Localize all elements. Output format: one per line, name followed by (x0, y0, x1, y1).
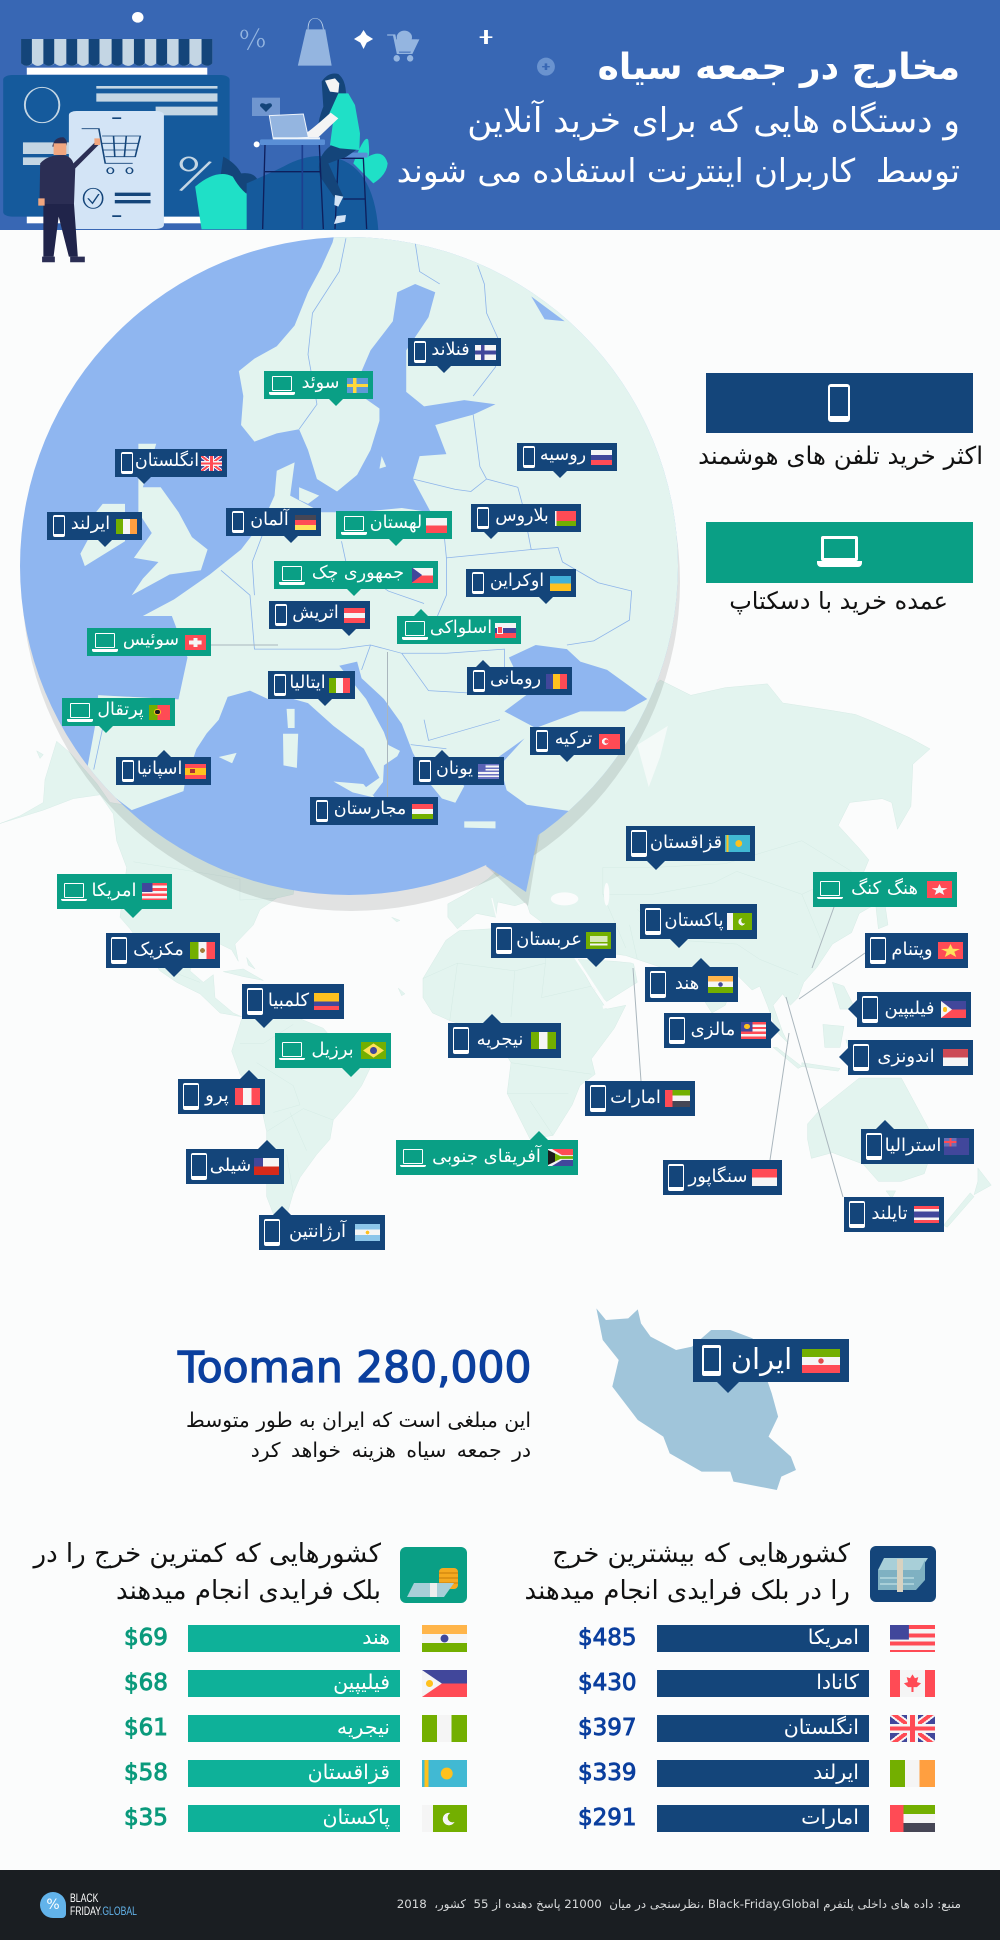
label: Italy: ایتالیا (289, 673, 326, 693)
label: Turkey: ترکیه (555, 729, 592, 749)
text: نیجریه (337, 1715, 390, 1739)
low spenders row: Kazakhstan (124, 1760, 467, 1787)
label: Australia (861, 1129, 974, 1164)
label: Portugal (62, 698, 175, 726)
text: $397 (578, 1715, 637, 1741)
text: $68 (124, 1670, 168, 1696)
label: UK (115, 449, 227, 477)
label: Italy (268, 671, 355, 699)
label: USA (57, 874, 172, 909)
label: Colombia (242, 984, 344, 1019)
top spenders row: UAE (578, 1805, 935, 1832)
label: Ukraine (466, 569, 576, 597)
label: South Africa (396, 1140, 578, 1175)
label: UAE: امارات (610, 1086, 661, 1108)
text: $339 (578, 1760, 637, 1786)
footer source text: منبع: داده های داخلی پلتفرم Black-Friday.Global ،نظرسنجی در میان 21000 پاسخ دهنده از 55 کشور، 2018 (397, 1897, 961, 1911)
label: Iran (693, 1339, 849, 1382)
label: Finland (408, 338, 501, 366)
label: Finland: فنلاند (431, 340, 470, 360)
text: قزاقستان (308, 1760, 390, 1784)
label: Ireland: ایرلند (71, 514, 110, 534)
label: Nigeria (448, 1023, 561, 1058)
label: Indonesia (848, 1040, 973, 1075)
label: Austria: اتریش (292, 603, 339, 623)
section title: top spenders: کشورهایی که بیشترین خرج (552, 1539, 850, 1569)
footer logo: FRIDAY.GLOBAL (70, 1904, 137, 1918)
text: $430 (578, 1670, 637, 1696)
label: Singapore: سنگاپور (689, 1166, 747, 1186)
text: $69 (124, 1625, 168, 1651)
connector lines (211, 645, 865, 1197)
text: در جمعه سیاه هزینه خواهد کرد (251, 1438, 531, 1462)
label: Iran: ایران (731, 1342, 792, 1376)
title: مخارج در جمعه سیاه (598, 47, 960, 88)
subtitle line 1: و دستگاه هایی که برای خرید آنلاین (467, 101, 960, 141)
text: $35 (124, 1805, 168, 1831)
label: Malaysia: مالزی (691, 1018, 735, 1040)
label: Germany: آلمان (250, 510, 289, 530)
label: Hong Kong: هنگ کنگ (851, 878, 918, 898)
icon: money stack (870, 1546, 936, 1602)
label: Kazakhstan: قزاقستان (650, 832, 722, 852)
label: Romania: رومانی (490, 669, 541, 689)
top spenders row: USA (578, 1625, 935, 1652)
label: Greece: یونان (436, 759, 473, 779)
label: Brazil (275, 1033, 391, 1068)
text: $61 (124, 1715, 168, 1741)
label: Hungary: مجارستان (334, 799, 406, 819)
label: Switzerland (87, 628, 211, 656)
footer logo (40, 1891, 137, 1918)
label: Turkey (530, 727, 625, 755)
text: $291 (578, 1805, 637, 1831)
top spenders row: UK (578, 1715, 935, 1742)
label: Mexico: مکزیک (133, 938, 184, 960)
text: هند (362, 1625, 390, 1649)
legend: desktop (706, 522, 973, 583)
label: Malaysia (664, 1013, 771, 1048)
text: کانادا (816, 1670, 859, 1694)
label: Russia: روسیه (540, 445, 586, 465)
legend caption: desktop: عمده خرید با دسکتاپ (729, 587, 948, 615)
label: Slovakia: اسلواکی (430, 618, 492, 638)
label: Sweden (264, 371, 373, 399)
label: Kazakhstan (626, 826, 755, 861)
label: Saudi Arabia (491, 923, 616, 958)
label: Peru: پرو (205, 1084, 229, 1106)
Africa, Asia, Australia (423, 680, 991, 1227)
store panel (3, 39, 230, 223)
label: Thailand: تایلند (871, 1202, 908, 1224)
label: Spain: اسپانیا (137, 759, 182, 779)
text: را در بلک فرایدی انجام میدهند (525, 1576, 850, 1606)
section title: low spenders: کشورهایی که کمترین خرج را در (34, 1539, 381, 1569)
text: بلک فرایدی انجام میدهند (116, 1576, 381, 1606)
world and Europe map (0, 237, 992, 1228)
label: Hungary (310, 797, 438, 825)
label: Pakistan (640, 904, 757, 939)
label: India (645, 967, 738, 1002)
label: Poland (336, 511, 452, 539)
phone with cart (69, 111, 164, 229)
text: امارات (801, 1805, 859, 1829)
label: Argentina: آرژانتین (289, 1220, 346, 1242)
low spenders row: India (124, 1625, 467, 1652)
footer band (0, 1870, 1000, 1940)
woman at laptop scene (247, 74, 388, 230)
footer logo: BLACK (70, 1891, 98, 1905)
left plant (195, 157, 273, 229)
label: Germany (226, 508, 321, 536)
label: Australia: استرالیا (885, 1134, 941, 1156)
label: Ireland (47, 512, 142, 540)
text: فیلیپین (333, 1670, 390, 1694)
label: Saudi Arabia: عربستان (516, 928, 582, 950)
label: Romania (467, 667, 572, 695)
label: UK: انگلستان (135, 451, 199, 471)
header band (0, 0, 1000, 230)
footer logo: % (46, 1897, 60, 1913)
label: Hong Kong (813, 872, 957, 907)
label: India: هند (675, 972, 699, 994)
circle shadow (22, 253, 680, 911)
text: ایرلند (813, 1760, 859, 1784)
text: انگلستان (784, 1715, 859, 1739)
Europe land (80, 237, 678, 828)
label: Colombia: کلمبیا (268, 990, 309, 1010)
label: Indonesia: اندونزی (877, 1046, 935, 1066)
label: USA: امریکا (91, 880, 136, 900)
label: Portugal: پرتقال (97, 700, 144, 720)
label: Chile: شیلی (210, 1154, 251, 1176)
label: Switzerland: سوئیس (123, 630, 179, 650)
label: Russia (517, 443, 617, 471)
label: Pakistan: پاکستان (664, 910, 724, 930)
subtitle line 2: توسط کاربران اینترنت استفاده می شوند (397, 152, 960, 190)
header illustration (3, 12, 555, 262)
label: Poland: لهستان (370, 513, 422, 533)
label: Thailand (844, 1197, 944, 1232)
label: Spain (116, 757, 211, 785)
floating icons (132, 12, 555, 76)
map callout tail (486, 830, 538, 892)
Iran map (596, 1308, 796, 1490)
label: Czech Republic (274, 561, 438, 589)
label: Sweden: سوئد (302, 373, 339, 393)
label: Mexico (106, 933, 220, 968)
amount description: این مبلغی است که ایران به طور متوسط (186, 1408, 531, 1432)
low spenders row: Philippines (124, 1670, 467, 1697)
label: South Africa: آفریقای جنوبی (432, 1146, 541, 1166)
label: UAE (585, 1081, 695, 1116)
label: Peru (178, 1079, 265, 1114)
text: امریکا (808, 1625, 859, 1649)
label: Brazil: برزیل (311, 1038, 354, 1060)
label: Slovakia (397, 616, 521, 644)
text: $58 (124, 1760, 168, 1786)
label: Philippines (857, 992, 971, 1027)
top spenders row: Ireland (578, 1760, 935, 1787)
label: Argentina (259, 1215, 385, 1250)
label: Austria (269, 601, 370, 629)
label: Belarus (471, 504, 581, 532)
label: Vietnam: ویتنام (891, 938, 933, 960)
top spenders row: Canada (578, 1670, 935, 1697)
icon: money and coins (400, 1547, 467, 1603)
label: Nigeria: نیجریه (477, 1028, 523, 1050)
label: Greece (413, 757, 504, 785)
label: Ukraine: اوکراین (490, 571, 544, 591)
man figure (38, 137, 100, 262)
label: Vietnam (865, 933, 968, 968)
Tooman amount: Tooman 280,000 (178, 1343, 531, 1392)
low spenders row: Nigeria (124, 1715, 467, 1742)
low spenders row: Pakistan (124, 1805, 467, 1832)
Americas (0, 741, 405, 1216)
label: Belarus: بلاروس (495, 506, 549, 526)
legend: smartphone (706, 373, 973, 433)
legend caption: smartphone: اکثر خرید تلفن های هوشمند (698, 441, 983, 470)
label: Singapore (663, 1160, 782, 1195)
text: $485 (578, 1625, 637, 1651)
label: Chile (186, 1149, 284, 1184)
label: Philippines: فیلیپین (884, 998, 934, 1018)
label: Czech Republic: جمهوری چک (312, 563, 404, 583)
text: پاکستان (322, 1805, 390, 1829)
